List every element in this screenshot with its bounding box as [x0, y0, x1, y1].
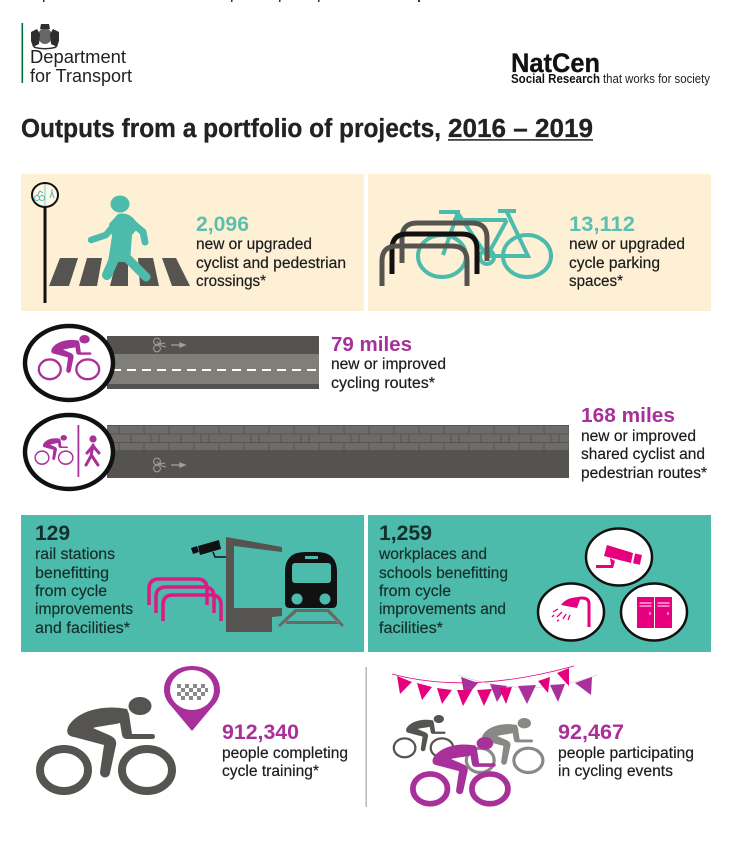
panel: workplaces and schools: [368, 515, 711, 652]
cycling routes text: cycling routes*: [331, 375, 435, 392]
icon: train: [278, 552, 344, 627]
workplaces text: 1,259: [379, 521, 432, 545]
workplaces text: improvements and: [379, 601, 506, 618]
divider: [366, 667, 367, 807]
workplaces text: [378, 521, 508, 637]
cycle training text: [222, 720, 348, 780]
road marking: cycle symbol and arrow: [154, 338, 185, 352]
panel: crossings: [21, 174, 364, 311]
cycling routes text: new or improved: [331, 356, 446, 373]
logo: NatCen: [511, 48, 711, 86]
cycle training text: people completing: [222, 745, 348, 762]
shared routes text: [581, 404, 707, 482]
cycling routes text: 79 miles: [331, 333, 412, 356]
icon: walking person: [91, 196, 146, 277]
cycling events text: 92,467: [558, 720, 624, 744]
parking text: cycle parking: [569, 255, 660, 272]
icon: bunting: [392, 666, 597, 706]
icon: finish location pin: [164, 666, 220, 731]
icon: grey cyclist: [40, 697, 172, 791]
crossings text: [196, 212, 346, 290]
cycling routes text: [331, 333, 446, 392]
icon: magenta cycle racks: [149, 579, 221, 621]
icon: CCTV camera: [191, 540, 226, 557]
panel: rail stations: [21, 515, 364, 652]
parking text: spaces*: [569, 273, 623, 290]
icon: bicycle: [418, 211, 551, 277]
logo: NatCen: Social Research: [511, 72, 600, 86]
cycling events text: [558, 720, 694, 780]
parking text: new or upgraded: [569, 236, 685, 253]
rail stations text: [35, 521, 133, 637]
title: 2016 – 2019: [448, 115, 593, 143]
shared routes text: new or improved: [581, 428, 696, 445]
road: cycling route: [107, 336, 319, 389]
title: Outputs from a portfolio of projects,: [21, 115, 441, 143]
logo: Department for Transport: Department: [30, 47, 126, 67]
workplaces text: from cycle: [379, 583, 451, 600]
logo: Department for Transport: [22, 23, 132, 86]
icon: cycle racks: [382, 223, 487, 286]
icon: cyclist roundel: [25, 326, 113, 400]
shared routes text: shared cyclist and: [581, 446, 705, 463]
road: shared route: [107, 425, 569, 478]
rail stations text: 129: [35, 521, 70, 545]
cycling events text: people participating: [558, 745, 694, 762]
logo: NatCen: NatCen: [511, 48, 600, 78]
icon: zebra crossing: [49, 258, 190, 286]
rail stations text: from cycle: [35, 583, 107, 600]
parking text: 13,112: [569, 212, 635, 236]
icon: camera roundel: [586, 528, 652, 586]
icon: royal crest: [31, 24, 59, 50]
crossings text: crossings*: [196, 273, 266, 290]
workplaces text: workplaces and: [378, 546, 487, 563]
crossings text: 2,096: [196, 212, 249, 236]
crossings text: cyclist and pedestrian: [196, 255, 346, 272]
workplaces text: facilities*: [379, 620, 443, 637]
rail stations text: improvements: [35, 601, 133, 618]
logo: NatCen: that works for society: [603, 72, 711, 86]
cycling events text: in cycling events: [558, 763, 673, 780]
cropped line of text at page top: [43, 0, 420, 2]
rail stations text: benefitting: [35, 565, 109, 582]
icon: shared path roundel: [25, 415, 113, 489]
cycle training text: 912,340: [222, 720, 299, 744]
cycle training text: cycle training*: [222, 763, 319, 780]
shared routes text: 168 miles: [581, 404, 675, 427]
icon: lockers roundel: [621, 584, 687, 640]
icon: three event cyclists: [394, 715, 543, 804]
crossings text: new or upgraded: [196, 236, 312, 253]
icon: station shelter: [226, 537, 282, 632]
road marking: cycle symbol and arrow: [154, 458, 185, 472]
rail stations text: and facilities*: [35, 620, 130, 637]
shared routes text: pedestrian routes*: [581, 465, 707, 482]
rail stations text: rail stations: [35, 546, 115, 563]
panel: cycle parking: [368, 174, 711, 311]
icon: cycle and pedestrian sign: [32, 183, 58, 303]
workplaces text: schools benefitting: [379, 565, 508, 582]
logo: Department for Transport: for Transport: [30, 66, 132, 86]
icon: shower roundel: [538, 584, 604, 640]
parking text: [569, 212, 685, 290]
